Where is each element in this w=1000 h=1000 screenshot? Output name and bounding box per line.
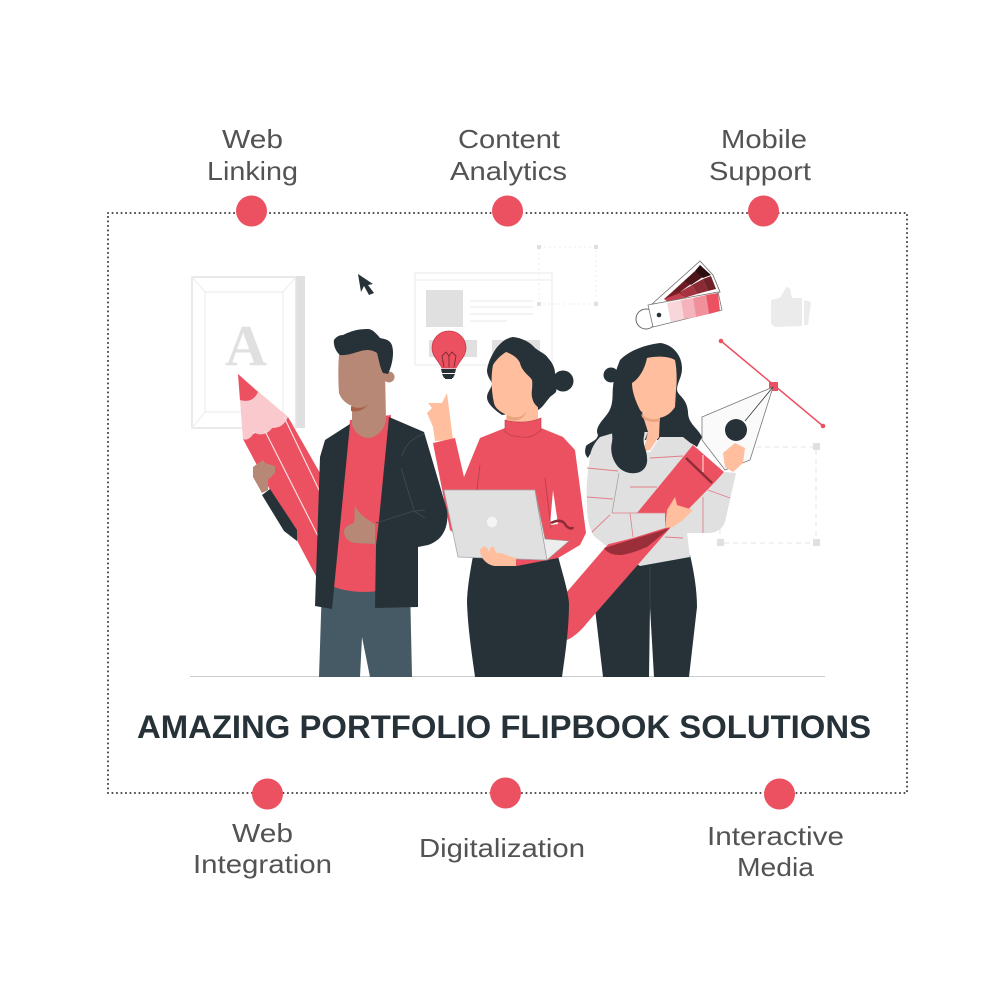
hair: [334, 329, 393, 374]
thumbs up hand: [344, 506, 375, 544]
pants: [319, 585, 412, 677]
sweater: [587, 432, 736, 566]
feature: Interactive Media: Interactive: [707, 821, 844, 851]
arm and hand on pencil: [253, 460, 297, 541]
feature: Web Integration: [193, 778, 332, 879]
feature: Web Linking: [207, 124, 298, 226]
pencil: [238, 374, 320, 578]
icon: light bulb: [432, 331, 466, 379]
feature: Interactive Media: Media: [737, 852, 815, 882]
skirt: [467, 556, 569, 677]
illustration: woman with pen: [566, 343, 773, 677]
illustration: woman with laptop: [427, 337, 586, 677]
ground line: [190, 676, 825, 678]
icon: dashed selection box right: [717, 443, 820, 546]
feature: Web Integration: Web: [232, 818, 293, 848]
feature: Content Analytics: Analytics: [450, 156, 567, 186]
laptop and hand: [444, 490, 569, 566]
turtleneck: [505, 418, 541, 437]
pen nib: [702, 387, 773, 470]
illustration: background design elements: [190, 245, 825, 676]
feature: Mobile Support: Support: [709, 156, 812, 186]
feature: Content Analytics: [450, 124, 567, 226]
neck and face: [338, 345, 394, 438]
illustration: man with pencil: [238, 329, 447, 677]
shirt: [332, 415, 391, 592]
icon: web page layout: [415, 273, 552, 365]
feature: Content Analytics: Content: [458, 124, 561, 154]
feature: Interactive Media: [707, 778, 844, 882]
back hair: [585, 343, 702, 458]
sleeve gap: [550, 490, 558, 525]
jacket: [315, 417, 447, 609]
bun and hair: [487, 337, 574, 415]
feature: Mobile Support: Mobile: [721, 124, 807, 154]
icon: letter A book: [192, 276, 305, 428]
feature: Digitalization: Digitalization: [419, 833, 585, 863]
icon: cursor arrow: [358, 274, 374, 295]
title: AMAZING PORTFOLIO FLIPBOOK SOLUTIONS: [137, 709, 871, 745]
raised hand: [427, 393, 453, 441]
neck: [505, 407, 538, 424]
icon: thumbs up: [771, 287, 811, 327]
icon: colour swatch fan: [636, 261, 722, 329]
feature: Web Linking: Linking: [207, 156, 298, 186]
icon: bezier handle line: [719, 339, 825, 428]
face: [632, 357, 677, 418]
jeans: [594, 555, 697, 677]
face: [492, 352, 538, 415]
feature: Digitalization: [419, 778, 585, 863]
hand on pen: [665, 497, 693, 528]
sweater: [433, 428, 586, 566]
forearm: [592, 513, 665, 545]
neck: [642, 413, 660, 452]
icon: dashed selection box top: [537, 245, 598, 306]
icon: letter A book: A: [225, 313, 267, 378]
pen shadow: [604, 528, 670, 555]
feature: Web Linking: Web: [222, 124, 283, 154]
hand on nib: [723, 443, 745, 472]
feature: Mobile Support: [709, 124, 812, 226]
front hair lock: [610, 358, 647, 473]
feature: Web Integration: Integration: [193, 849, 332, 879]
giant pen barrel: [566, 445, 724, 640]
